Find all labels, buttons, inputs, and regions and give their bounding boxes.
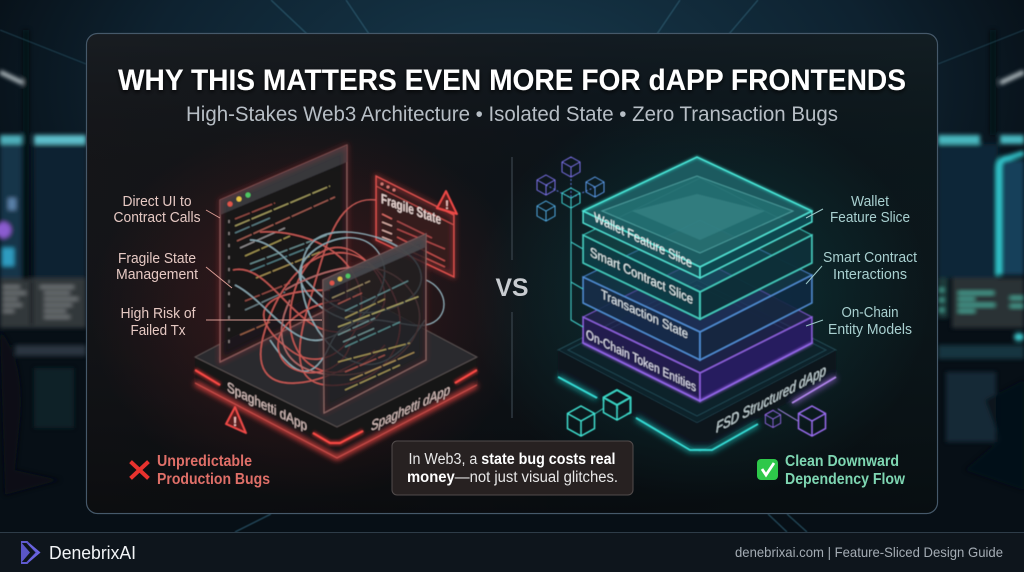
right callouts xyxy=(806,193,918,338)
icon: fragile state warning: ! xyxy=(445,198,449,212)
fragile state window: Fragile State xyxy=(381,191,441,228)
icon: teal cubes xyxy=(568,390,630,436)
icon: green check xyxy=(757,459,778,480)
label: high risk of failed tx xyxy=(120,305,196,339)
callout: state bug costs real money: In Web3, a state bug costs real xyxy=(408,451,616,468)
label: fragile state management: Fragile State xyxy=(118,250,196,267)
icon: platform warning xyxy=(226,407,246,433)
label: wallet feature slice: Wallet xyxy=(851,193,890,210)
main panel xyxy=(86,34,938,514)
callout: state bug costs real money xyxy=(392,441,633,495)
slab: transaction state: Transaction State xyxy=(601,287,688,342)
label: on-chain entity models xyxy=(828,304,912,338)
right verdict: clean downward dependency flow: Clean Downward xyxy=(785,453,899,470)
logo text: DenebrixAI xyxy=(49,543,136,563)
footer source text: denebrixai.com | Feature-Sliced Design Guide xyxy=(735,544,1003,560)
left callouts xyxy=(114,193,322,339)
label: on-chain entity models: On-Chain xyxy=(842,304,898,321)
VS label: VS xyxy=(496,274,528,302)
platform label: FSD Structured dApp xyxy=(716,362,826,437)
footer bar xyxy=(0,532,1024,572)
slab: smart contract slice: Smart Contract Slice xyxy=(590,244,693,307)
label: high risk of failed tx: Failed Tx xyxy=(130,322,186,339)
label: direct UI to contract calls: Direct UI to xyxy=(122,193,192,210)
base platform xyxy=(558,280,836,452)
slab: on-chain token entities xyxy=(583,259,812,401)
slab: wallet feature slice xyxy=(583,157,812,278)
platform label right: Spaghetti dApp xyxy=(371,382,450,435)
slab: wallet feature slice: Wallet Feature Slice xyxy=(594,209,692,271)
front code window xyxy=(323,234,426,413)
label: high risk of failed tx: High Risk of xyxy=(120,305,196,322)
slab: transaction state xyxy=(583,220,812,360)
icon: purple cubes xyxy=(765,406,826,436)
slab: on-chain token entities: On-Chain Token Entities xyxy=(586,327,696,395)
label: wallet feature slice xyxy=(830,193,910,226)
left verdict: unpredictable production bugs: Unpredictable xyxy=(157,453,252,470)
label: direct UI to contract calls: Contract Calls xyxy=(114,209,200,226)
label: wallet feature slice: Feature Slice xyxy=(830,209,910,226)
left verdict: unpredictable production bugs: Production Bugs xyxy=(157,471,270,488)
label: fragile state management xyxy=(116,250,199,283)
right verdict: clean downward dependency flow: Dependency Flow xyxy=(785,471,905,488)
panel: FSD stack illustration xyxy=(537,157,836,452)
label: on-chain entity models: Entity Models xyxy=(828,321,912,338)
platform label left: Spaghetti dApp xyxy=(227,380,307,435)
icon: fragile state warning xyxy=(437,191,457,214)
back code window xyxy=(220,145,347,362)
label: smart contract interactions xyxy=(823,249,918,283)
title: WHY THIS MATTERS EVEN MORE FOR dAPP FRONTENDS xyxy=(118,64,906,97)
icon: red cross xyxy=(132,463,147,477)
icon: blockchain cluster xyxy=(537,157,604,221)
label: smart contract interactions: Smart Contract xyxy=(823,249,918,266)
logo icon xyxy=(21,542,39,563)
callout: state bug costs real money: money—not just visual glitches. xyxy=(407,469,618,486)
fragile state window xyxy=(376,176,454,277)
dependency connector lines xyxy=(571,200,583,327)
label: direct UI to contract calls xyxy=(114,193,200,226)
right verdict: clean downward dependency flow xyxy=(757,453,905,488)
left verdict: unpredictable production bugs xyxy=(132,453,270,488)
label: smart contract interactions: Interactions xyxy=(833,266,907,283)
panel: spaghetti dApp illustration xyxy=(195,145,477,458)
label: fragile state management: Management xyxy=(116,266,199,283)
platform base xyxy=(195,283,477,458)
slab: smart contract slice xyxy=(583,178,812,319)
icon: platform warning: ! xyxy=(233,414,237,429)
tangled wires xyxy=(233,200,444,385)
subtitle: High-Stakes Web3 Architecture • Isolated State • Zero Transaction Bugs xyxy=(186,103,838,126)
